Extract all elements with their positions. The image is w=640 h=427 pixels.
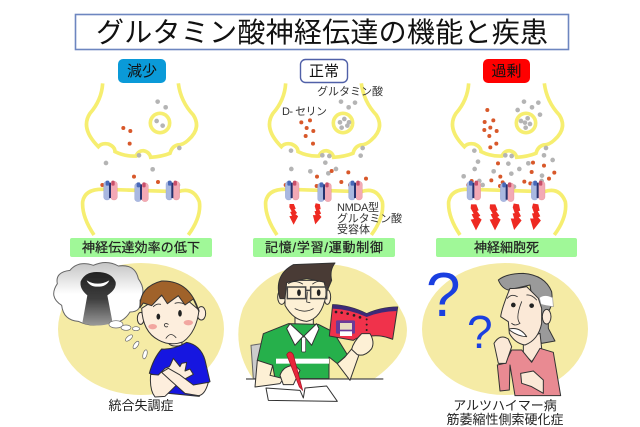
illustration: elderly woman — [494, 273, 561, 396]
label: D-serine: D- セリン — [282, 105, 327, 118]
result label: decrease: 神経伝達効率の低下 — [82, 240, 200, 255]
man — [255, 263, 360, 387]
label: NMDA receptor: 受容体 — [337, 222, 370, 236]
panel: excess — [422, 59, 588, 427]
illustration background: normal — [238, 264, 407, 379]
result label: decrease — [70, 238, 212, 257]
badge: excess — [483, 59, 530, 83]
caption: schizophrenia: 統合失調症 — [108, 398, 174, 413]
badge: normal: 正常 — [309, 63, 339, 80]
illustration background: excess — [422, 263, 588, 395]
badge: normal — [300, 60, 348, 82]
synapse diagram: normal — [266, 83, 383, 235]
caption: alzheimer and ALS: 筋萎縮性側索硬化症 — [446, 412, 564, 427]
illustration background: decrease — [58, 263, 224, 395]
label: glutamate: グルタミン酸 — [317, 84, 383, 98]
result label: normal — [253, 238, 395, 257]
panel: decrease — [54, 59, 224, 413]
result label: normal: 記憶/学習/運動制御 — [265, 240, 383, 255]
badge: decrease: 減少 — [127, 63, 157, 80]
icon: large question mark: ? — [426, 261, 460, 330]
illustration: boy — [132, 281, 210, 397]
thought cloud — [54, 262, 143, 342]
result label: excess — [436, 238, 577, 257]
illustration: man studying — [246, 263, 398, 401]
badge: excess: 過剰 — [491, 63, 522, 80]
badge: decrease — [118, 59, 166, 83]
table line — [246, 378, 383, 380]
icon: small question mark: ? — [467, 306, 493, 358]
chair — [251, 344, 262, 379]
red book and hand — [329, 305, 398, 355]
title: グルタミン酸神経伝達の機能と疾患 — [96, 17, 548, 48]
result label: excess: 神経細胞死 — [474, 240, 539, 255]
open notebook — [266, 386, 337, 401]
panel: normal — [238, 60, 407, 401]
caption: alzheimer and ALS: アルツハイマー病 — [453, 398, 557, 413]
label: NMDA receptor: グルタミン酸 — [337, 211, 402, 225]
synapse diagram: decrease — [83, 83, 200, 235]
label: NMDA receptor: NMDA型 — [337, 200, 379, 214]
red pen and hand — [280, 352, 303, 390]
synapse diagram: excess — [449, 83, 566, 235]
